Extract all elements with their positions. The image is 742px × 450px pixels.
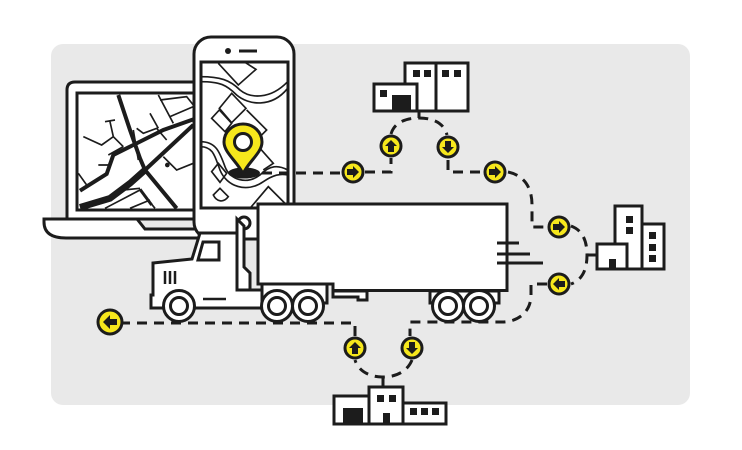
truck trailer: [258, 204, 507, 290]
truck chassis: [262, 284, 327, 303]
background panel: [51, 44, 690, 405]
marker: down arrow top right: [438, 137, 458, 157]
icon: location pin: [224, 124, 262, 178]
marker: down arrow bottom right: [402, 338, 422, 358]
marker: right arrow 1: [343, 162, 363, 182]
marker: up arrow top left: [381, 136, 401, 156]
marker: right arrow 2: [485, 162, 505, 182]
truck cab: [151, 233, 265, 308]
trailer rear fender: [430, 291, 499, 303]
icon: smartphone with map: [194, 37, 294, 239]
laptop street map: [78, 95, 193, 208]
icon: top warehouse: [374, 63, 468, 111]
icon: bottom factory: [334, 387, 446, 424]
marker: route end left arrow: [98, 310, 122, 334]
icon: truck: [151, 204, 543, 322]
marker: right arrow to city: [549, 217, 569, 237]
phone street map: [201, 62, 288, 208]
icon: right city buildings: [597, 206, 664, 269]
marker: up arrow bottom left: [345, 338, 365, 358]
marker: left arrow from city: [549, 274, 569, 294]
wheels: [164, 290, 494, 322]
icon: laptop with map: [44, 82, 200, 238]
dashed route: [122, 111, 597, 387]
trailer tail lines: [497, 243, 543, 263]
